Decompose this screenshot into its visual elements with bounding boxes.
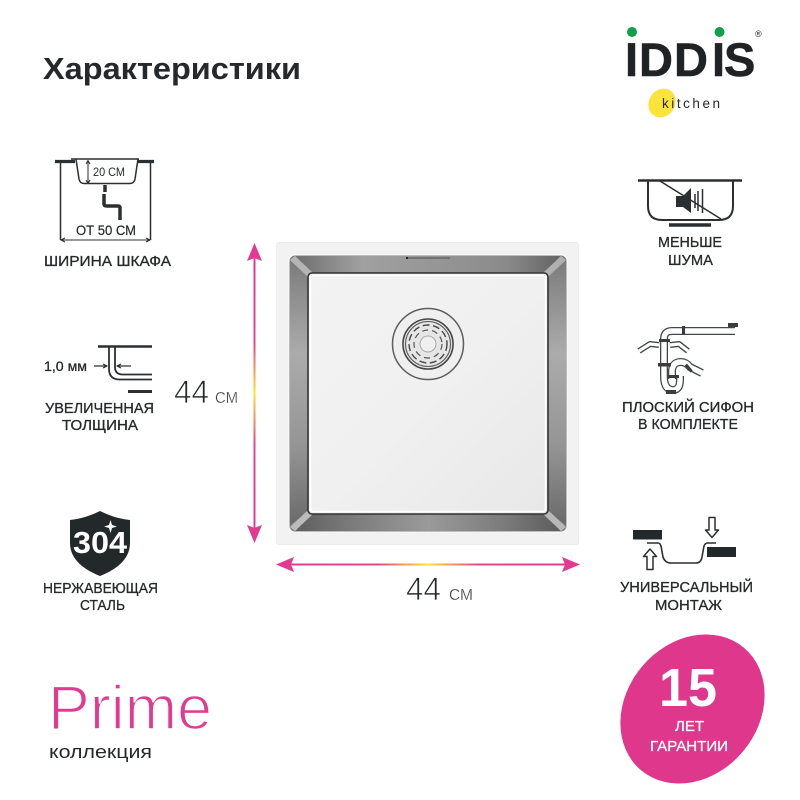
logo: IDDIS kitchen xyxy=(625,27,762,123)
depth label: 20 СМ xyxy=(93,165,125,179)
width label: ОТ 50 СМ xyxy=(76,222,136,238)
label: МОНТАЖ xyxy=(655,597,722,614)
icon: mounting options xyxy=(633,518,736,570)
feature: universal mounting xyxy=(620,518,753,614)
sink bowl walls xyxy=(289,255,567,532)
registered mark: ® xyxy=(755,29,762,39)
horizontal dimension label xyxy=(406,571,473,607)
sparkle xyxy=(104,520,117,533)
icon: siphon xyxy=(639,323,738,394)
yellow blob xyxy=(643,83,681,123)
label: УВЕЛИЧЕННАЯ xyxy=(45,400,154,417)
label: ПЛОСКИЙ СИФОН xyxy=(622,398,754,416)
warranty years: 15 xyxy=(659,658,717,718)
label: УНИВЕРСАЛЬНЫЙ xyxy=(620,578,753,596)
horizontal dimension label: 44 xyxy=(406,571,441,607)
grade number: 304 xyxy=(73,525,128,560)
horizontal dimension label: СМ xyxy=(449,587,473,604)
warranty badge xyxy=(591,605,794,800)
vertical dimension arrow xyxy=(247,243,262,543)
logo wordmark: IDDIS xyxy=(625,33,755,86)
feature: stainless steel 304 xyxy=(43,511,158,614)
drain xyxy=(392,308,464,380)
collection name: Prime xyxy=(48,674,212,743)
vertical dimension label: 44 xyxy=(174,374,209,410)
thickness value: 1,0 мм xyxy=(44,358,87,374)
title: Характеристики xyxy=(43,51,301,86)
label: В КОМПЛЕКТЕ xyxy=(638,416,738,433)
sink floor xyxy=(308,273,548,514)
collection caption: коллекция xyxy=(49,742,152,762)
feature: flat siphon xyxy=(622,323,754,433)
label: НЕРЖАВЕЮЩАЯ xyxy=(43,580,158,597)
sink rim xyxy=(276,242,579,545)
label: ШИРИНА ШКАФА xyxy=(44,253,171,270)
icon: quiet sink xyxy=(638,180,742,225)
vertical dimension label: СМ xyxy=(215,390,238,407)
product photo: sink xyxy=(276,242,579,545)
warranty text line 1: ЛЕТ xyxy=(675,718,704,735)
vertical dimension label xyxy=(174,374,238,410)
label: ТОЛЩИНА xyxy=(62,417,138,434)
kitchen wordmark: kitchen xyxy=(662,96,720,111)
label: МЕНЬШЕ xyxy=(658,234,722,251)
logo green dot left xyxy=(627,27,637,37)
logo green dot right xyxy=(714,27,724,37)
feature: increased thickness xyxy=(44,346,154,434)
feature: cabinet width xyxy=(44,159,171,270)
label: ШУМА xyxy=(668,252,713,269)
warranty text line 2: ГАРАНТИИ xyxy=(650,738,728,755)
icon: sink in cabinet xyxy=(55,159,154,242)
horizontal dimension arrow xyxy=(276,557,580,572)
label: СТАЛЬ xyxy=(80,597,125,614)
feature: less noise xyxy=(638,180,742,269)
